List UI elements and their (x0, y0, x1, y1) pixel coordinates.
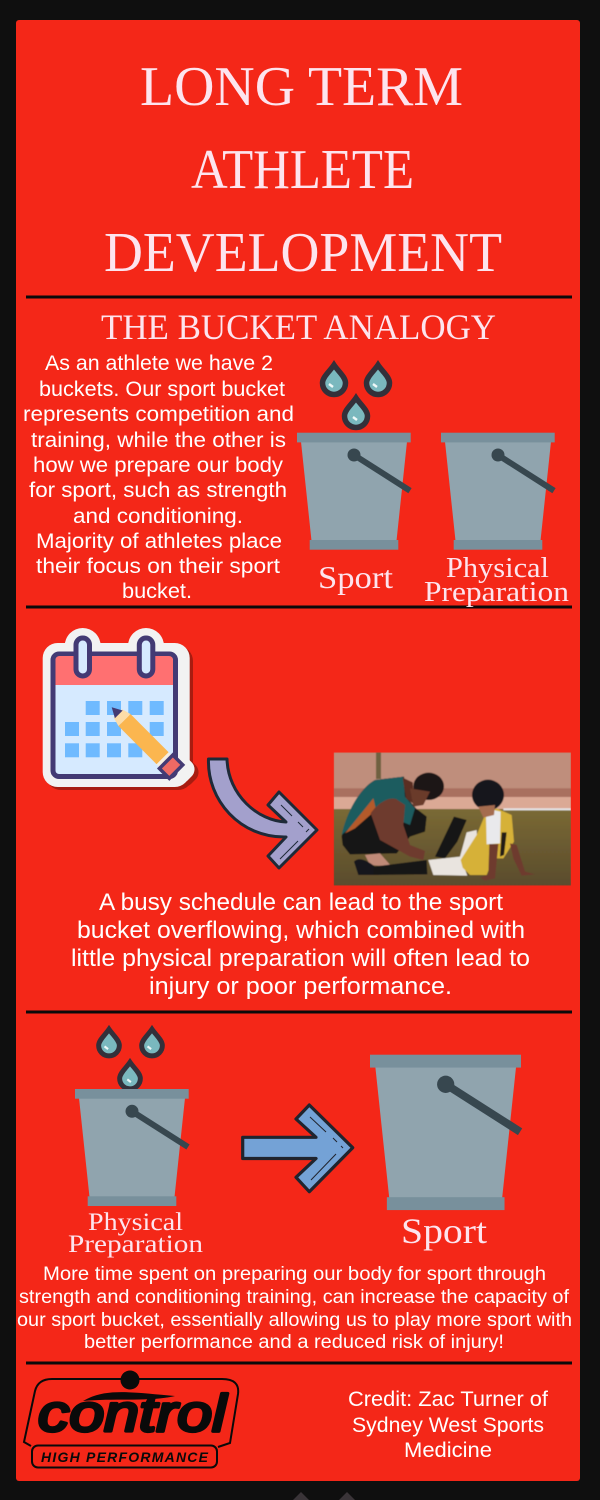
boy legs (354, 859, 375, 875)
text block: busy schedule: injury or poor performance. (149, 973, 452, 1000)
icon: physical preparation bucket (441, 433, 555, 550)
text block: credit: Credit: Zac Turner of (348, 1388, 548, 1411)
text block: bucket intro: their focus on their sport (36, 555, 280, 578)
title: LONG TERM (140, 56, 463, 118)
man (342, 777, 427, 854)
text block: bucket intro: bucket. (122, 580, 192, 603)
arrow: curved purple (208, 759, 317, 868)
text block: busy schedule: little physical preparation will often lead to (71, 945, 530, 972)
boy shorts (428, 830, 477, 876)
text block: more time (17, 1264, 572, 1353)
text block: credit: Medicine (404, 1439, 492, 1462)
text block: credit: Sydney West Sports (352, 1414, 544, 1437)
icon: calendar with pencil (43, 628, 203, 791)
text block: bucket intro: how we prepare our body (33, 454, 284, 477)
photo: coach helping injured player (334, 752, 571, 886)
text block: bucket intro: training, while the other is (31, 429, 286, 452)
text block: bucket intro: buckets. Our sport bucket (39, 378, 285, 401)
text block: bucket intro: and conditioning. (73, 505, 243, 528)
label: sport: Sport (318, 559, 393, 595)
text block: bucket intro: As an athlete we have 2 (45, 352, 273, 375)
text block: busy schedule: bucket overflowing, which combined with (77, 917, 525, 944)
arrow: blue (243, 1105, 353, 1192)
text block: more time: strength and conditioning training, can increase the capacity of (19, 1287, 570, 1308)
label: physical preparation lower (68, 1209, 204, 1258)
text block: more time: our sport bucket, essentially allowing us to play more sport with (17, 1310, 572, 1331)
title: ATHLETE (191, 139, 414, 201)
icon: small physical preparation bucket (75, 1089, 189, 1206)
label: physical preparation: Physical (446, 553, 549, 584)
label: sport lower: Sport (401, 1211, 487, 1251)
heading: the bucket analogy: THE BUCKET ANALOGY (101, 307, 496, 347)
text block: bucket intro: represents competition and (23, 403, 294, 426)
text block: busy schedule (71, 889, 530, 1000)
icon: water drops lower (99, 1029, 162, 1089)
logo: control high performance: control (38, 1385, 228, 1443)
boy bib (461, 808, 514, 875)
text block: bucket intro: for sport, such as strength (29, 479, 287, 502)
icon: water drops top (322, 365, 390, 428)
text block: busy schedule: A busy schedule can lead to the sport (99, 889, 503, 916)
logo: control high performance: HIGH PERFORMANCE (41, 1449, 209, 1465)
text block: credit (348, 1388, 548, 1462)
text block: more time: better performance and a reduced risk of injury! (84, 1332, 504, 1353)
text block: bucket intro: Majority of athletes place (36, 530, 282, 553)
title (104, 56, 502, 284)
label: physical preparation lower: Preparation (68, 1231, 204, 1258)
label: physical preparation (424, 553, 569, 608)
text block: bucket intro (23, 352, 294, 603)
logo: control high performance (24, 1370, 238, 1468)
icon: sport bucket (297, 433, 411, 550)
icon: large sport bucket (370, 1055, 521, 1210)
text block: more time: More time spent on preparing our body for sport through (43, 1264, 546, 1285)
title: DEVELOPMENT (104, 222, 502, 284)
label: physical preparation: Preparation (424, 577, 569, 608)
label: physical preparation lower: Physical (88, 1209, 183, 1236)
